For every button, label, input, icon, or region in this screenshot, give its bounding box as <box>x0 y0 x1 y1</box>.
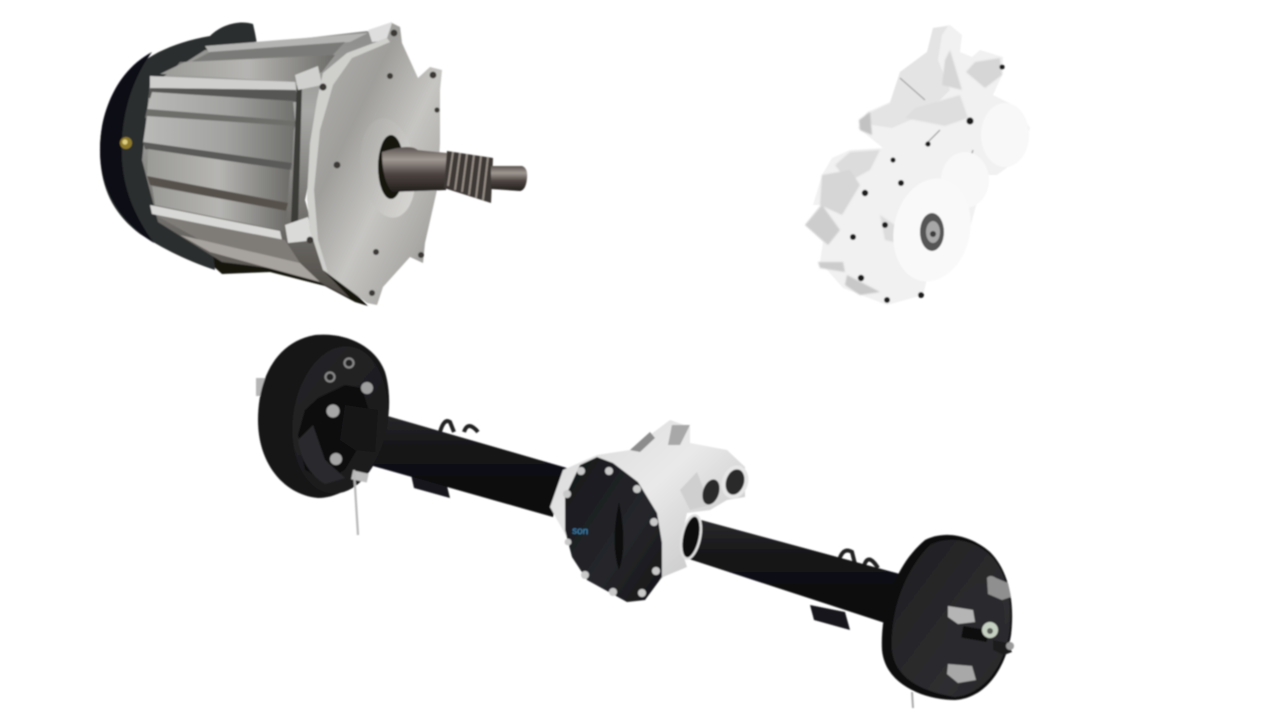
motor black end cap <box>100 22 260 270</box>
motor cooling panels and ribs <box>143 33 368 282</box>
differential housing ribs <box>630 425 710 510</box>
gearbox centre bearing <box>920 213 944 251</box>
axle right brake cable <box>912 692 913 708</box>
axle left brake cable <box>354 470 358 535</box>
gearbox shaded webs <box>805 50 1002 295</box>
motor output shaft <box>382 147 447 192</box>
gearbox bolts <box>850 64 1005 303</box>
motor mounting lugs <box>285 22 395 243</box>
gearbox silhouette <box>805 25 1030 305</box>
axle right brake drum silhouette <box>882 535 1012 700</box>
axle right mounting brackets <box>810 550 878 630</box>
motor shaft bore <box>378 135 404 199</box>
motor front flange <box>307 23 442 305</box>
motor cylinder body <box>142 31 395 298</box>
gearbox: pale aluminium housing <box>805 25 1030 305</box>
differential black cover <box>565 457 662 602</box>
axle right wheel studs <box>947 576 1011 683</box>
gearbox arm shadow <box>900 78 973 180</box>
gearbox side lobes <box>941 103 1029 208</box>
motor helical pinion gear <box>444 151 493 203</box>
motor flange highlight <box>307 38 390 273</box>
motor cap darker rim <box>100 52 154 243</box>
axle right hub disc <box>936 577 1014 683</box>
axle right brake drum face <box>892 540 1010 697</box>
differential ports <box>699 462 753 507</box>
axle left tube <box>352 408 567 517</box>
gearbox bearing face <box>884 171 980 289</box>
differential cover ridge <box>614 502 624 570</box>
axle left mounting brackets <box>410 421 478 498</box>
axle left bolts <box>326 358 373 483</box>
differential silver housing <box>550 420 745 600</box>
motor underside shadow <box>195 236 368 306</box>
rear axle assembly <box>256 335 1014 708</box>
axle right hub spline nut <box>961 622 1014 655</box>
differential cover bolts <box>563 467 660 597</box>
axle right tube <box>683 517 900 624</box>
axle left brake backing detail <box>298 385 372 484</box>
differential cover logo: son <box>572 526 588 537</box>
differential tube collar <box>678 514 704 560</box>
motor: electric motor with pinion shaft <box>100 22 527 306</box>
motor cap screw <box>120 137 132 149</box>
axle left hub collar <box>340 405 378 452</box>
gearbox upper ribs <box>865 26 958 128</box>
axle left brake drum face <box>283 340 397 500</box>
motor flange bolt holes <box>307 30 440 296</box>
motor centre boss <box>354 115 422 221</box>
axle left hub stub <box>256 378 270 396</box>
axle left brake drum silhouette <box>258 335 389 498</box>
motor shaft tip <box>491 166 527 191</box>
